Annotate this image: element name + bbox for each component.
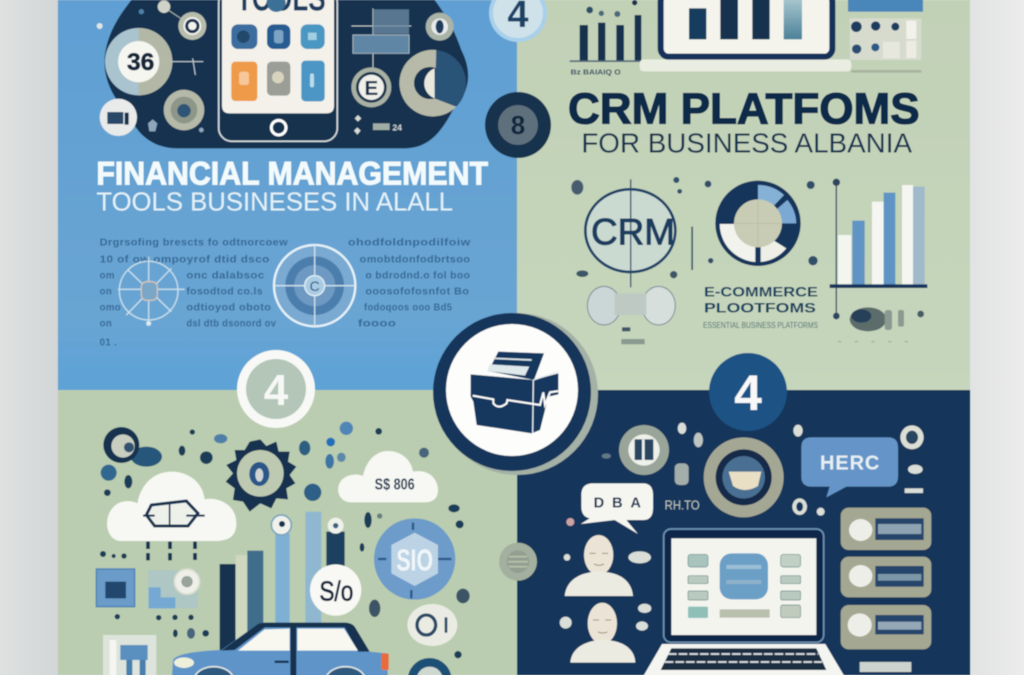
badge: number 4 left (237, 350, 315, 428)
panel: cloud and fintech tools (58, 390, 518, 675)
heading: CRM platforms: FOR BUSINESS ALBANIA (581, 128, 912, 159)
small bar chart (570, 0, 641, 76)
coffee badge (704, 437, 784, 517)
icon: coin dial: SIO (396, 544, 433, 578)
icon: blue dial: C (310, 278, 320, 294)
CRM lens icon (571, 179, 677, 344)
person top (565, 535, 633, 596)
right side widgets: E (364, 77, 378, 100)
small scattered icons: RH.TO (665, 498, 700, 512)
heading: financial management: TOOLS BUSINESES IN ALALL (96, 187, 453, 217)
body text left: 10 of ow ompoyrof dtid dsco (100, 254, 270, 265)
home button (271, 120, 286, 135)
central toolbox badge (433, 313, 598, 475)
scattered dots (673, 177, 818, 270)
heading: financial management: FINANCIAL MANAGEMENT (96, 155, 488, 191)
body text left: onc dalabsoc (186, 270, 265, 281)
body text left: on (100, 286, 112, 297)
percent badge: S/o (319, 576, 353, 607)
panel: financial management tools (58, 0, 518, 390)
small node icons (97, 0, 206, 40)
body text right: o bdrodnd.o fol boo (365, 270, 470, 281)
blue tiles (96, 569, 200, 675)
donut with number 36: 36 (127, 49, 154, 76)
body text left: dsl dtb dsonord ov (186, 318, 277, 329)
heading: CRM platforms (568, 84, 920, 159)
small bar chart: Bz BAIAIQ O (571, 67, 621, 76)
status cards (841, 508, 931, 649)
app icons (231, 24, 325, 101)
heading: CRM platforms: CRM PLATFOMS (568, 84, 920, 133)
body text right: ohodfoldnpodilfoiw (348, 238, 471, 249)
car (171, 623, 389, 675)
body text right: fodoqoos ooo Bd5 (364, 302, 453, 313)
small data label: 24 (392, 122, 402, 132)
speech bubble blue (801, 437, 898, 497)
panel: CRM platforms (517, 0, 970, 390)
speech bubble white: DBA (594, 495, 641, 511)
speech bubble white (581, 483, 653, 534)
rising bar chart (830, 179, 927, 319)
body text left: omo (100, 302, 121, 313)
icon: upload cloud left (107, 472, 236, 562)
control panel widget (848, 0, 923, 73)
CRM lens icon: CRM (591, 211, 675, 252)
badge: number 8 circle: 8 (511, 110, 525, 140)
body text left: on (100, 318, 112, 329)
round icons lower left (100, 90, 204, 136)
e-commerce platforms label (703, 284, 818, 330)
e-commerce platforms label: PLOOTFOMS (704, 300, 816, 316)
person bottom (570, 603, 635, 663)
badge: number 4 top (489, 0, 547, 42)
panel: customer support (517, 390, 970, 675)
heading: financial management: FINANCIAL MANAGEMENT (96, 155, 488, 191)
icon: toolbox (471, 352, 558, 433)
chip badge (407, 604, 457, 675)
icon: pin badge (103, 427, 162, 467)
body text left: odtioyod oboto (186, 302, 271, 313)
eye icon (838, 307, 924, 342)
bar group (220, 512, 345, 654)
right side widgets (351, 8, 466, 116)
speech bubble blue: HERC (820, 452, 879, 474)
heading: CRM platforms: CRM PLATFOMS (568, 84, 920, 133)
badge: number 8 circle (485, 92, 551, 158)
body text right: ooosofofosnfot Bo (365, 286, 469, 297)
body text right: omobtdonfodbrtsoo (360, 254, 470, 265)
body text right: foooo (358, 318, 396, 329)
icon: savings cloud: S$ 806 (375, 477, 415, 494)
small data label (354, 115, 402, 135)
heading: financial management (96, 155, 488, 217)
body text left: om (100, 270, 115, 281)
scattered dots (100, 422, 470, 658)
body text left (100, 238, 288, 348)
icon: network wheel (118, 257, 185, 325)
icon: coin dial (374, 518, 455, 600)
dark device cloud (104, 0, 468, 148)
badge: number 4 right (709, 353, 787, 431)
badge: number 4 right: 4 (734, 365, 762, 421)
body text left: fosodtod co.ls (186, 286, 263, 297)
e-commerce platforms label: E-COMMERCE (704, 284, 818, 300)
laptop (643, 529, 845, 675)
e-commerce platforms label: ESSENTIAL BUSINESS PLATFORMS (703, 321, 818, 330)
percent badge (310, 564, 361, 616)
body text left: 01 . (100, 337, 117, 348)
small scattered icons (560, 423, 924, 672)
donut with number 36 (105, 28, 203, 95)
body text left: Drgrsofing brescts fo odtnorcoew (100, 238, 288, 249)
body text right (348, 238, 471, 329)
monitor with bars (640, 0, 851, 71)
coin at quadrant junction (499, 543, 537, 581)
scan badge (619, 425, 669, 475)
icon: savings cloud (338, 451, 438, 502)
icon: blue dial (274, 245, 355, 327)
phone (219, 0, 337, 141)
badge: number 4 left: 4 (264, 366, 289, 415)
donut chart (715, 181, 801, 266)
icon: gear (226, 439, 296, 512)
